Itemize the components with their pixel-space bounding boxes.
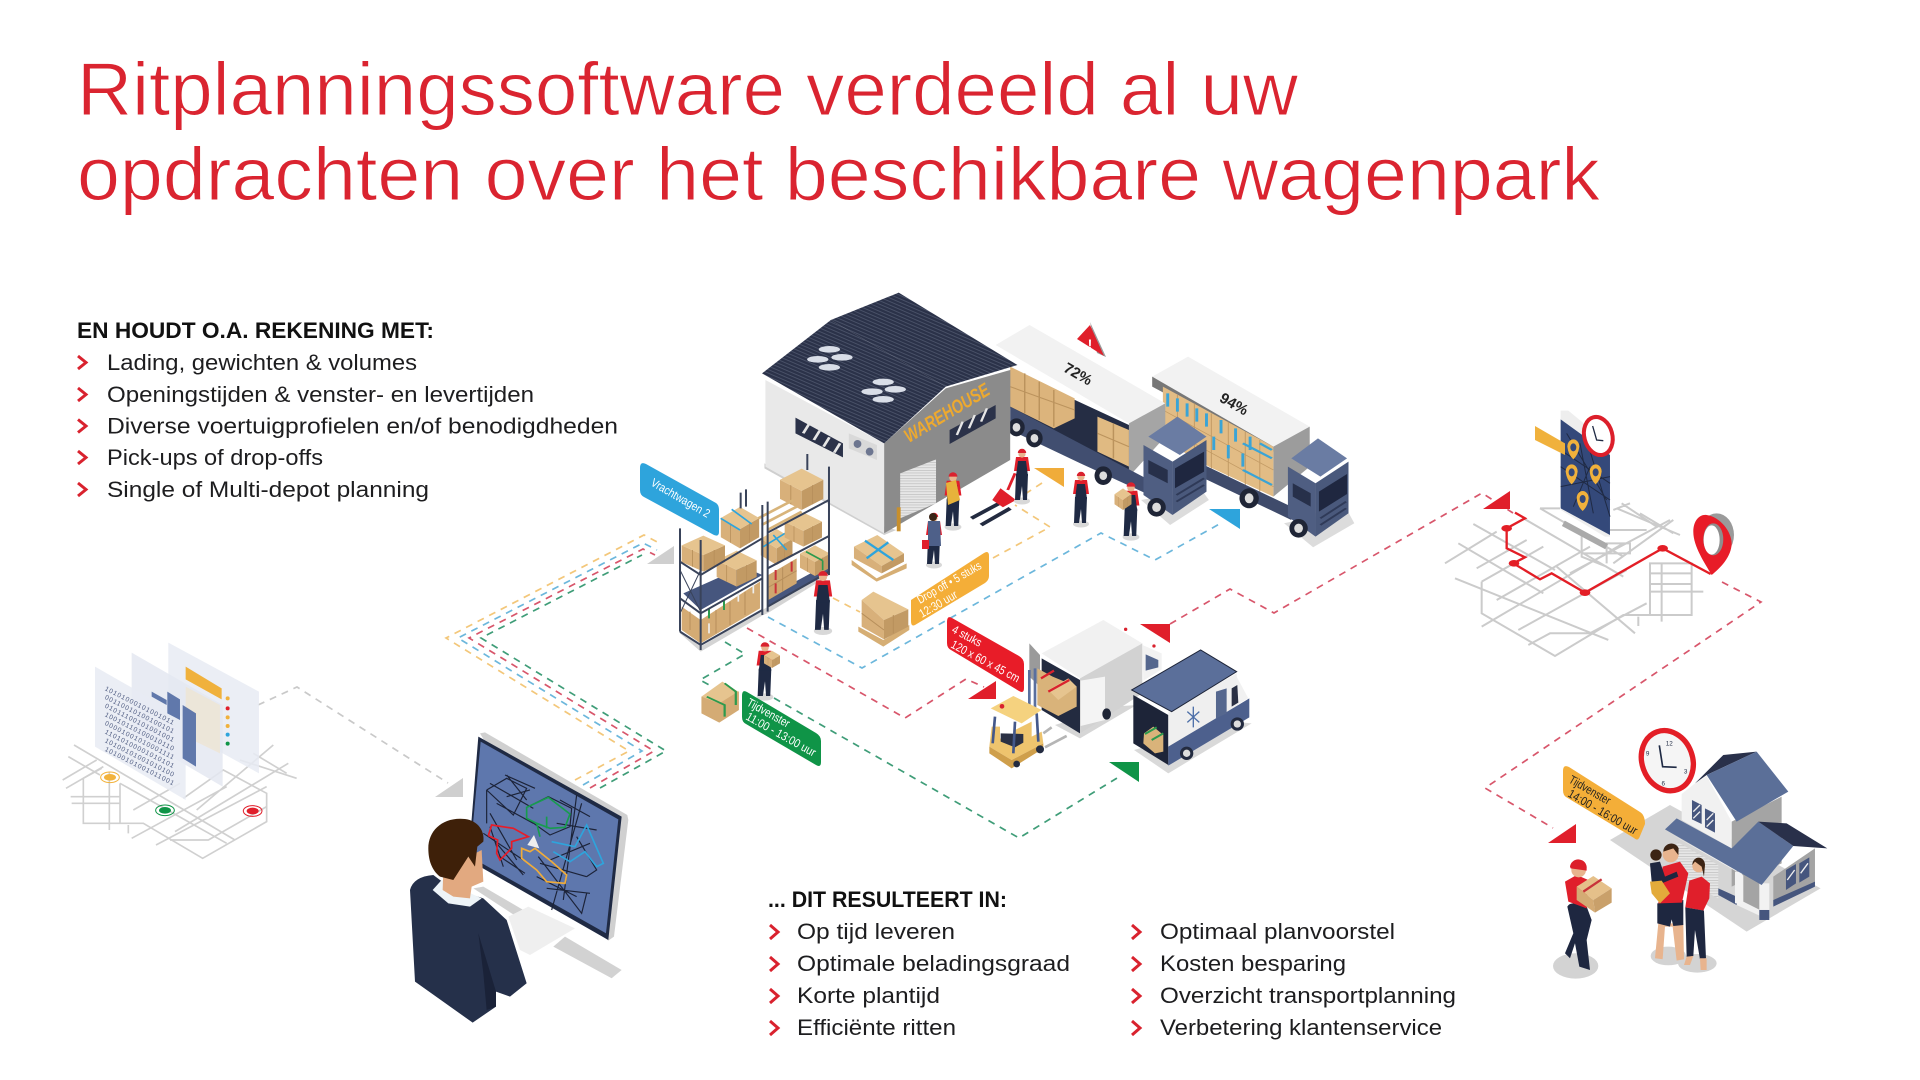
bottom worker and small boxes — [701, 642, 780, 723]
icon: clock: 9 — [1646, 750, 1650, 757]
label: tijdvenster 14-16: 14:00 - 16:00 uur — [1566, 786, 1640, 838]
map with document layers: 01011100101001001 — [103, 703, 175, 744]
label: 4 stuks: 4 stuks — [950, 622, 984, 650]
delivery truck — [1029, 620, 1162, 738]
label: tijdvenster 14-16 — [1563, 766, 1645, 840]
label: tijdvenster 11-13 — [742, 691, 821, 766]
computer monitor — [468, 732, 628, 978]
icon: location pin — [1693, 513, 1734, 575]
text block: en houdt o.a. rekening met: EN HOUDT O.A. REKENING MET: — [77, 318, 434, 343]
text block: dit resulteert in: Verbetering klantenservice — [1160, 1015, 1442, 1040]
warehouse sign: WAREHOUSE — [901, 379, 995, 447]
text block: en houdt o.a. rekening met: Openingstijden & venster- en levertijden — [107, 382, 534, 407]
label: 4 stuks: 120 x 60 x 45 cm — [949, 637, 1022, 685]
refrigerated van — [1132, 650, 1252, 773]
text block: en houdt o.a. rekening met: Diverse voertuigprofielen en/of benodigdheden — [107, 414, 618, 438]
label: vrachtwagen 2: Vrachtwagen 2 — [648, 475, 713, 521]
text block: en houdt o.a. rekening met: Single of Multi-depot planning — [107, 477, 429, 502]
courier with parcel — [1553, 859, 1612, 979]
load percentages: 72% — [1060, 360, 1095, 389]
title: opdrachten over het beschikbare wagenpark — [77, 132, 1601, 216]
map with document layers: 00001001010001111 — [103, 720, 175, 761]
icon: clock: 3 — [1684, 769, 1688, 776]
text block: dit resulteert in: Kosten besparing — [1160, 951, 1346, 976]
text block: dit resulteert in: Op tijd leveren — [797, 919, 955, 944]
family — [1650, 844, 1717, 973]
person at computer — [410, 819, 527, 1023]
truck: 94% — [1152, 357, 1354, 547]
label: drop off: Drop off • 5 stuks — [914, 558, 984, 607]
load percentages — [1060, 360, 1251, 419]
label: drop off: 12:30 uur — [916, 587, 960, 621]
text block: dit resulteert in: Overzicht transportplanning — [1160, 983, 1456, 1008]
label: 4 stuks — [947, 617, 1024, 692]
icon: warning triangle: ! — [1088, 336, 1092, 352]
title — [77, 47, 1601, 216]
house — [1610, 752, 1827, 932]
warehouse workers — [922, 449, 1139, 568]
smartphone with pins and clock — [1535, 411, 1617, 547]
forklift — [989, 696, 1067, 768]
map with document layers: 10100101001011001 — [103, 746, 175, 787]
text block: dit resulteert in: Optimaal planvoorstel — [1160, 919, 1395, 944]
icon: clock — [1633, 723, 1702, 798]
text block: en houdt o.a. rekening met: Pick-ups of drop-offs — [107, 445, 323, 470]
load percentages: 94% — [1216, 390, 1251, 419]
map with route — [1445, 503, 1711, 656]
text block: dit resulteert in: ... DIT RESULTEERT IN: — [768, 887, 1007, 912]
icon: clock: 12 — [1666, 740, 1673, 747]
label: tijdvenster 11-13: 11:00 - 13:00 uur — [744, 709, 819, 759]
label: drop off — [911, 552, 989, 626]
text block: dit resulteert in: Efficiënte ritten — [797, 1015, 956, 1040]
truck: 72% — [996, 325, 1209, 525]
map with document layers: 10100101001010100 — [103, 738, 175, 779]
map with document layers: 11010100001010101 — [103, 729, 175, 770]
text block: en houdt o.a. rekening met — [77, 318, 618, 502]
text block: dit resulteert in: Korte plantijd — [797, 983, 940, 1008]
rack with boxes — [680, 454, 830, 652]
text block: dit resulteert in — [768, 887, 1456, 1040]
text block: en houdt o.a. rekening met: Lading, gewichten & volumes — [107, 350, 417, 375]
label: tijdvenster 14-16: Tijdvenster — [1566, 772, 1613, 808]
icon: warning triangle — [1077, 322, 1106, 357]
map with document layers — [63, 643, 297, 858]
arrow markers — [435, 468, 1576, 843]
title: Ritplanningssoftware verdeeld al uw — [77, 47, 1299, 131]
rack worker — [814, 571, 832, 635]
pallet truck — [971, 473, 1016, 525]
map with document layers: 10010110100010110 — [103, 712, 175, 753]
map with document layers: 10101000101001011 — [103, 686, 175, 727]
warehouse — [762, 293, 1017, 535]
text block: dit resulteert in: Optimale beladingsgraad — [797, 951, 1070, 976]
map with document layers: 00110010100100101 — [103, 694, 175, 735]
label: tijdvenster 11-13: Tijdvenster — [745, 695, 792, 730]
pallets with boxes — [852, 535, 909, 647]
label: vrachtwagen 2 — [640, 463, 719, 536]
icon: clock: 6 — [1662, 780, 1666, 787]
dashed route lines — [258, 483, 1761, 838]
